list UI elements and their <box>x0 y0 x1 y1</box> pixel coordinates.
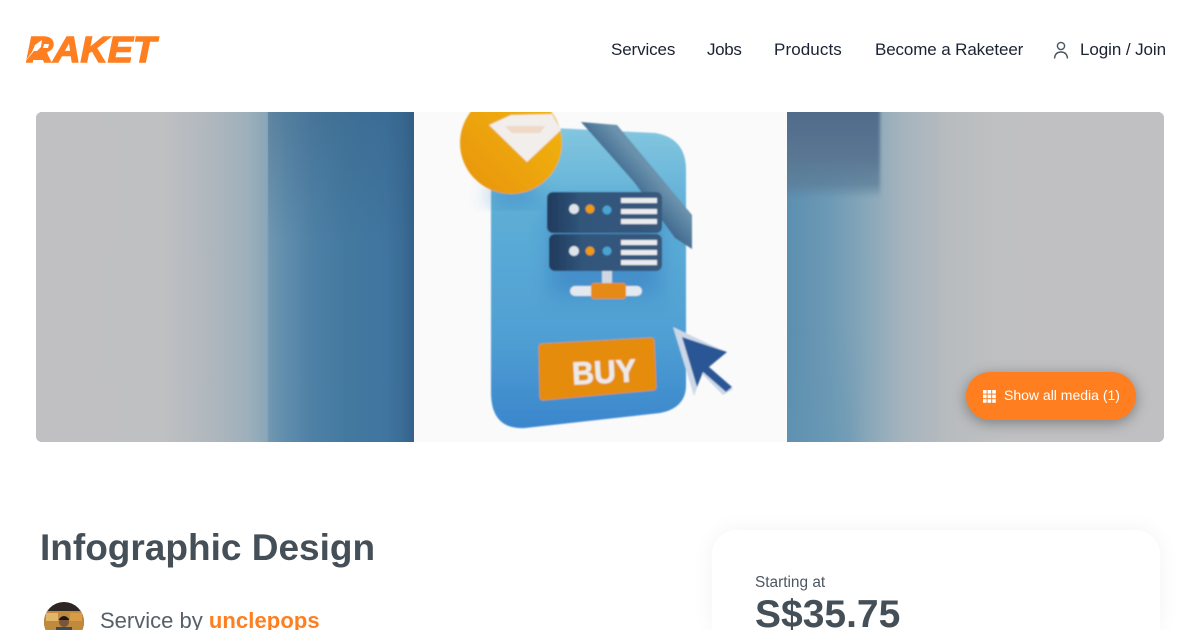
buy label: BUY <box>571 352 637 392</box>
pricing card <box>712 530 1160 630</box>
nav link: products: Products <box>774 40 842 59</box>
diamond <box>489 114 561 162</box>
title: Infographic Design <box>40 527 375 568</box>
button label: Show all media (1) <box>1004 387 1120 403</box>
blurred right backdrop <box>787 112 1164 442</box>
blurred right backdrop dark corner <box>781 106 880 198</box>
starting at label: Starting at <box>755 574 825 591</box>
server lights <box>569 204 612 256</box>
nav link: jobs: Jobs <box>707 40 742 59</box>
network connector <box>570 271 642 299</box>
navigation bar <box>611 40 1166 59</box>
coin <box>460 92 562 194</box>
document sheet <box>491 125 686 428</box>
blurred left backdrop top shade <box>268 112 414 242</box>
folded ribbon <box>581 122 692 249</box>
server bottom unit <box>549 234 662 271</box>
blurred right backdrop lower blue block <box>771 332 856 462</box>
illustration: document with server and buy button <box>460 92 733 428</box>
show all media button <box>966 372 1136 420</box>
icon: grid <box>983 390 996 403</box>
server shadow <box>550 205 660 295</box>
cursor outline <box>673 327 733 396</box>
nav link: services: Services <box>611 40 675 59</box>
icon: user <box>1054 42 1068 59</box>
seller avatar <box>44 602 84 630</box>
cursor <box>682 337 732 392</box>
buy button <box>542 341 653 397</box>
image background <box>414 112 787 442</box>
blurred left backdrop <box>36 112 414 442</box>
hero media gallery <box>36 112 1164 442</box>
coin shadow <box>487 185 543 205</box>
nav link: login / join: Login / Join <box>1080 40 1166 59</box>
centre product image <box>414 112 787 442</box>
nav link: become a raketeer: Become a Raketeer <box>875 40 1023 59</box>
logo: RAKET <box>26 30 159 70</box>
server vents <box>621 198 657 265</box>
server top unit <box>547 192 662 233</box>
